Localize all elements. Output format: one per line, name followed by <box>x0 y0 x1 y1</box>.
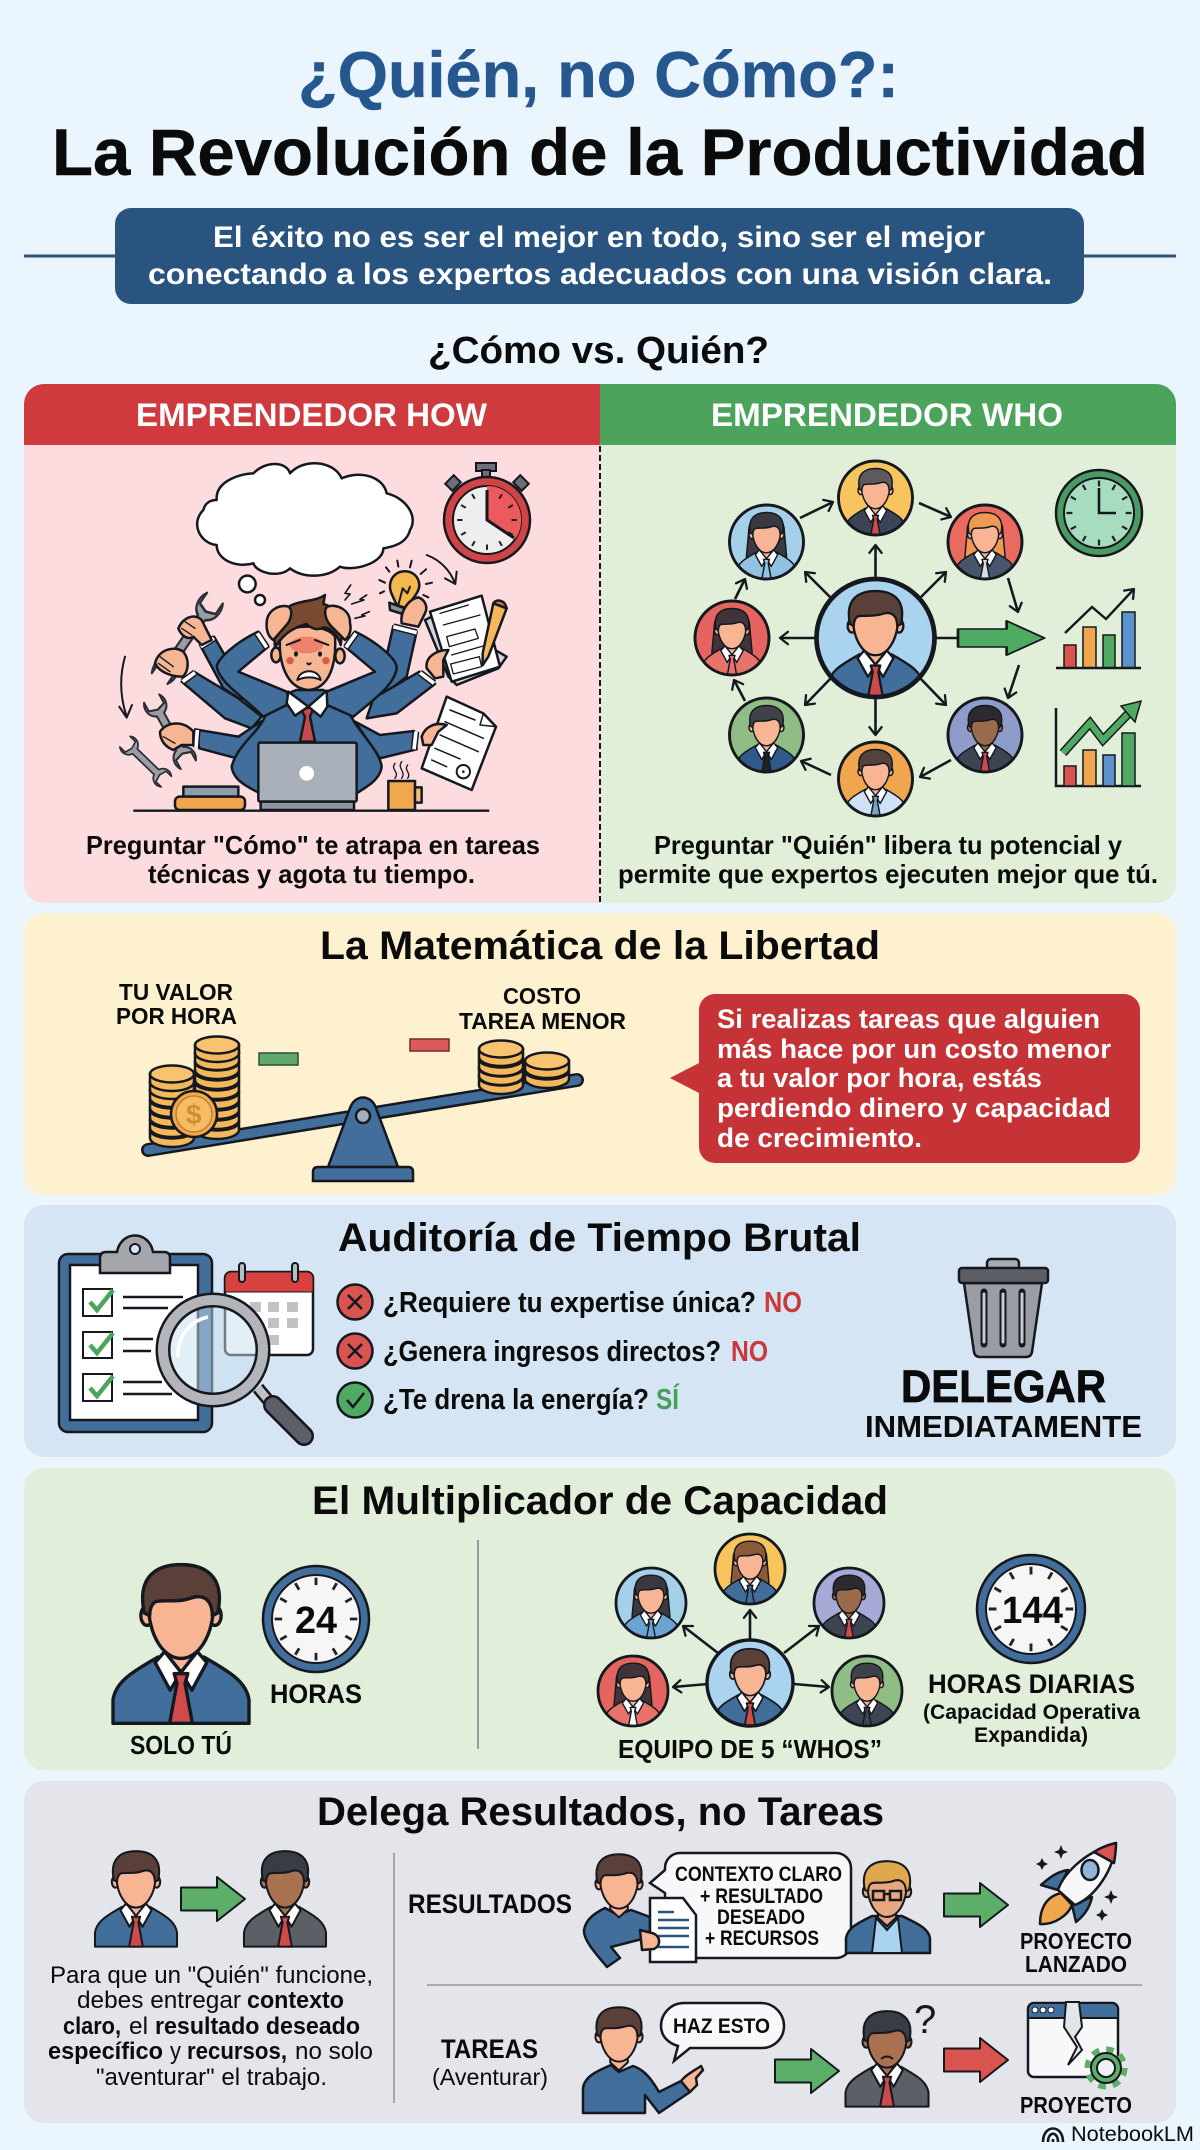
icon: mug <box>388 762 422 810</box>
text: delegation explanation: Para que un "Quién" funcione, <box>50 1962 373 1989</box>
icon: x <box>338 1284 372 1320</box>
subtitle: ¿Cómo vs. Quién? <box>428 330 769 372</box>
icon: 24 hours clock <box>263 1566 369 1672</box>
caption: who <box>618 830 1158 889</box>
label: resultados: RESULTADOS <box>408 1889 572 1919</box>
icon: balance scale with coins: $ <box>186 1099 202 1130</box>
arrow: green <box>775 2049 839 2093</box>
icon: 144 hours clock: 144 <box>1002 1590 1063 1632</box>
icon: document <box>640 1898 696 1962</box>
panel: how vs who comparison <box>24 384 1176 903</box>
heading: Delega Resultados, no Tareas <box>317 1790 884 1834</box>
arrow: green <box>944 1883 1008 1927</box>
label: equipo de 5 whos: EQUIPO DE 5 “WHOS” <box>618 1734 882 1764</box>
arrow: green output <box>958 621 1044 655</box>
logo: notebooklm: NotebookLM <box>1071 2123 1194 2146</box>
icon: signed contract <box>422 697 496 790</box>
title: ¿Quién, no Cómo?: <box>298 38 899 111</box>
speech box: brief: + RECURSOS <box>705 1927 819 1950</box>
panel: auditoría de tiempo brutal <box>24 1205 1176 1457</box>
icon: clipboard checklist <box>59 1236 212 1432</box>
icon: man torso and tie <box>183 627 434 793</box>
title <box>52 38 1148 189</box>
label: horas diarias: (Capacidad Operativa <box>923 1701 1140 1724</box>
label: tu valor por hora <box>116 979 237 1029</box>
speech box: brief: CONTEXTO CLARO <box>675 1863 842 1886</box>
heading: emprendedor who: EMPRENDEDOR WHO <box>711 397 1063 433</box>
icon: confused worker: ? <box>914 1998 936 2042</box>
question 1: NO <box>764 1287 802 1319</box>
label: tareas: (Aventurar) <box>432 2064 548 2090</box>
arrows: network <box>734 502 1019 777</box>
icon: man head <box>267 595 351 690</box>
question 1: ¿Requiere tu expertise única? <box>383 1287 756 1319</box>
speech box: brief: + RESULTADO <box>700 1885 823 1908</box>
text: delegation explanation: contexto <box>247 1987 344 2014</box>
label: proyecto: PROYECTO <box>1020 2092 1132 2118</box>
text: delegation explanation: y <box>170 2038 181 2065</box>
title: La Revolución de la Productividad <box>52 115 1148 189</box>
label: tareas: TAREAS <box>441 2034 538 2064</box>
icon: expert with glasses <box>846 1861 930 1953</box>
caption: who: Preguntar "Quién" libera tu potencial y <box>654 830 1123 860</box>
arrow: red <box>944 2038 1008 2082</box>
callout: a tu valor por hora, estás <box>717 1063 1042 1093</box>
label: costo tarea menor: COSTO <box>503 983 581 1009</box>
label: costo tarea menor: TAREA MENOR <box>459 1008 626 1034</box>
text: delegation explanation: específico <box>48 2038 163 2065</box>
text: delegation explanation: recursos, <box>187 2038 287 2065</box>
text: delegation explanation: debes entregar <box>77 1987 241 2014</box>
text: delegation explanation: resultado deseado <box>155 2013 360 2040</box>
chart: hub and spoke network of whos <box>695 461 1022 818</box>
label: delegar inmediatamente: INMEDIATAMENTE <box>865 1409 1142 1444</box>
label: horas: HORAS <box>270 1679 362 1709</box>
caption: how <box>86 830 540 889</box>
caption: how: técnicas y agota tu tiempo. <box>148 859 475 889</box>
icon: person delegates to person <box>95 1851 326 1947</box>
label: horas diarias <box>923 1669 1140 1747</box>
icon: x <box>338 1334 372 1368</box>
icon: books <box>175 787 245 810</box>
icon: wrenches in hands <box>118 591 225 788</box>
heading: emprendedor how: EMPRENDEDOR HOW <box>136 397 488 433</box>
icon: light bulb <box>345 561 432 618</box>
text: delegation explanation: claro, <box>63 2013 121 2040</box>
label: tu valor por hora: TU VALOR <box>119 979 233 1005</box>
label: proyecto lanzado <box>1020 1928 1132 1977</box>
chart: team of five <box>598 1534 902 1728</box>
question 2: ¿Genera ingresos directos? <box>383 1336 721 1368</box>
chart: rising bars and line <box>1056 589 1141 668</box>
panel: el multiplicador de capacidad <box>24 1468 1176 1770</box>
icon: laptop <box>258 743 357 810</box>
label: proyecto lanzado: PROYECTO <box>1020 1928 1132 1954</box>
icon: documents and pencil <box>425 596 507 685</box>
callout: perdiendo dinero y capacidad <box>717 1093 1111 1123</box>
icon: green clock <box>1056 470 1142 556</box>
label: proyecto lanzado: LANZADO <box>1025 1951 1127 1977</box>
label: horas diarias: Expandida) <box>974 1724 1088 1747</box>
speech bubble: haz esto: HAZ ESTO <box>673 2015 770 2038</box>
label: delegar inmediatamente <box>865 1361 1142 1444</box>
icon: person with document <box>584 1854 650 1967</box>
text: delegation explanation <box>48 1962 373 2091</box>
speech box: brief: DESEADO <box>717 1906 805 1929</box>
label: costo tarea menor <box>459 983 626 1034</box>
icon: broken project window <box>1028 2002 1123 2085</box>
label: horas diarias: HORAS DIARIAS <box>928 1669 1135 1699</box>
callout: de crecimiento. <box>717 1123 922 1153</box>
caption: how: Preguntar "Cómo" te atrapa en tareas <box>86 830 540 860</box>
label: tareas <box>432 2034 548 2090</box>
label: solo tú: SOLO TÚ <box>130 1730 232 1760</box>
icon: magnifying glass <box>163 1300 304 1436</box>
audit questions <box>338 1284 802 1418</box>
icon: stressed multitasking man scene <box>118 463 507 811</box>
question 3: SÍ <box>656 1382 680 1416</box>
callout: Si realizas tareas que alguien <box>717 1004 1100 1034</box>
icon: calendar <box>225 1266 313 1355</box>
caption: who: permite que expertos ejecuten mejor que tú. <box>618 859 1158 889</box>
callout <box>670 994 1140 1163</box>
icon: 144 hours clock <box>977 1555 1085 1663</box>
icon: thought cloud <box>197 463 413 605</box>
banner: conectando a los expertos adecuados con una visión clara. <box>148 258 1052 291</box>
icon: person pointing <box>583 2007 703 2113</box>
back arms <box>182 626 435 758</box>
icon: balance scale with coins <box>148 1036 577 1181</box>
icon: rocket <box>1036 1843 1118 1924</box>
heading: El Multiplicador de Capacidad <box>312 1479 888 1523</box>
label: tu valor por hora: POR HORA <box>116 1003 237 1029</box>
panel: delega resultados, no tareas <box>24 1781 1176 2123</box>
heading: La Matemática de la Libertad <box>320 924 880 968</box>
question 3: ¿Te drena la energía? <box>383 1384 649 1416</box>
speech box: brief <box>650 1853 851 1958</box>
callout: más hace por un costo menor <box>717 1034 1112 1064</box>
icon: stopwatch <box>444 463 530 563</box>
icon: 24 hours clock: 24 <box>295 1600 337 1642</box>
banner: El éxito no es ser el mejor en todo, sino ser el mejor <box>213 221 985 254</box>
icon: solo person <box>113 1565 249 1723</box>
icon: red minus <box>410 1039 449 1051</box>
icon: confused worker <box>846 1998 936 2107</box>
question 2: NO <box>731 1336 768 1368</box>
heading: Auditoría de Tiempo Brutal <box>338 1216 861 1260</box>
icon: curved arrows <box>119 555 457 718</box>
label: delegar inmediatamente: DELEGAR <box>901 1361 1106 1412</box>
icon: check <box>338 1382 372 1418</box>
panel: la matemática de la libertad <box>24 913 1176 1195</box>
chart: growth arrow and bars <box>1056 701 1141 786</box>
speech bubble: haz esto <box>661 2003 784 2061</box>
text: delegation explanation: "aventurar" el trabajo. <box>96 2064 327 2091</box>
icon: green minus <box>259 1053 298 1065</box>
text: delegation explanation: el <box>129 2013 148 2040</box>
icon: other hands <box>401 597 448 745</box>
banner <box>115 208 1084 304</box>
text: delegation explanation: no solo <box>295 2038 373 2065</box>
icon: trash can <box>959 1259 1048 1357</box>
